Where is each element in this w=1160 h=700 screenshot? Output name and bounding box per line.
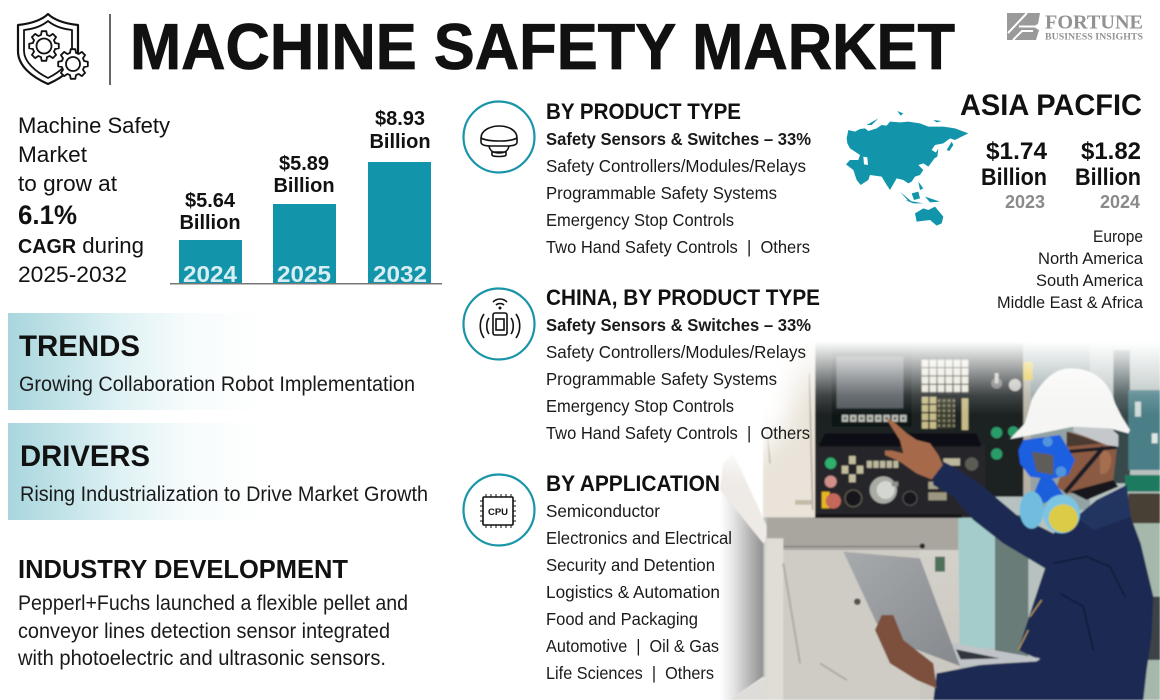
panel: drivers <box>8 423 428 520</box>
icon: CPU chip: CPU <box>488 507 508 518</box>
section: by application: Semiconductor <box>546 501 660 521</box>
panel: trends: Growing Collaboration Robot Implementation <box>19 373 415 396</box>
stat: 2024 value: $1.82 <box>1081 138 1141 165</box>
section: by product type: Programmable Safety Systems <box>546 183 777 203</box>
bar chart: market size: Billion <box>273 175 335 197</box>
section: by application: Security and Detention <box>546 555 715 575</box>
title: MACHINE SAFETY MARKET <box>130 10 955 83</box>
growth summary text: Market <box>18 142 88 167</box>
control panel <box>815 340 1023 518</box>
worker goggles and respirator <box>1018 435 1080 533</box>
bar chart: market size: 2024 <box>183 261 237 287</box>
section: by application: BY APPLICATION <box>546 471 720 496</box>
header divider <box>109 14 111 85</box>
stat: 2024 value <box>1075 138 1141 212</box>
grey machine side panel <box>720 453 772 700</box>
worker helmet <box>1010 368 1130 447</box>
section: by product type: BY PRODUCT TYPE <box>546 99 741 124</box>
panel: trends: TRENDS <box>19 330 140 363</box>
other regions list: Europe <box>1093 227 1143 246</box>
bar chart: market size: Billion <box>369 131 431 153</box>
panel: drivers: DRIVERS <box>20 440 150 473</box>
growth summary text: to grow at <box>18 171 118 196</box>
section: by application: Logistics & Automation <box>546 582 720 602</box>
growth summary text: CAGR during <box>18 233 144 258</box>
stat: 2023 value: 2023 <box>1005 192 1045 212</box>
section: by product type: Safety Sensors & Switches – 33% <box>546 129 811 149</box>
bar chart: market size: 2032 <box>373 261 427 287</box>
growth summary text <box>18 113 171 287</box>
other regions list: North America <box>1038 249 1144 268</box>
heading: Asia Pacific: ASIA PACFIC <box>960 89 1142 122</box>
icon: CPU chip <box>464 474 534 546</box>
stat: 2024 value: Billion <box>1075 164 1141 191</box>
stat: 2023 value: $1.74 <box>986 138 1048 165</box>
photo fades <box>690 318 1160 470</box>
other regions list: South America <box>1036 271 1144 290</box>
section: by application: Electronics and Electrical <box>546 528 732 548</box>
section: by product type: Emergency Stop Controls <box>546 210 734 230</box>
logo icon: shield with gears <box>18 14 88 84</box>
lower hand <box>875 615 937 688</box>
section: by product type <box>546 99 811 257</box>
panel: industry development: conveyor lines detection sensor integrated <box>18 620 390 643</box>
bar chart: market size: $5.89 <box>279 153 329 175</box>
worker jacket <box>933 462 1153 700</box>
section: by application <box>546 471 732 683</box>
photo: worker at machine control panel <box>720 340 1160 700</box>
section: china by product type: Programmable Safety Systems <box>546 369 777 389</box>
stat: 2024 value: 2024 <box>1100 192 1140 212</box>
cabinet <box>765 517 960 700</box>
brand logo: Fortune Business Insights <box>1007 12 1143 42</box>
panel: industry development: Pepperl+Fuchs launched a flexible pellet and <box>18 592 408 615</box>
section: by application: Automotive | Oil & Gas <box>546 636 719 656</box>
section: by application: Life Sciences | Others <box>546 663 714 683</box>
panel: industry development <box>17 554 408 670</box>
laptop <box>843 552 1040 666</box>
upper wall <box>763 340 817 517</box>
panel: industry development: INDUSTRY DEVELOPMENT <box>18 554 348 584</box>
map: Asia Pacific <box>846 111 968 226</box>
icon: wireless sensor <box>464 288 534 360</box>
section: china by product type: Two Hand Safety Controls | Others <box>546 423 810 443</box>
section: china by product type: Emergency Stop Controls <box>546 396 734 416</box>
section: china by product type <box>546 285 820 443</box>
other regions list: Middle East & Africa <box>997 293 1144 312</box>
growth summary text: 6.1% <box>18 200 77 230</box>
panel: industry development: with photoelectric and ultrasonic sensors. <box>17 647 386 670</box>
factory background <box>763 340 1160 700</box>
panel: trends <box>8 313 415 410</box>
worker face <box>1057 432 1118 500</box>
growth summary text: 2025-2032 <box>18 262 127 287</box>
section: by product type: Two Hand Safety Controls | Others <box>546 237 810 257</box>
brand logo: Fortune Business Insights: FORTUNE <box>1045 12 1143 34</box>
bar chart: market size: $5.64 <box>185 190 236 212</box>
stat: 2023 value: Billion <box>981 164 1047 191</box>
stat: 2023 value <box>981 138 1048 212</box>
section: by product type: Safety Controllers/Modules/Relays <box>546 156 806 176</box>
bar chart: market size: 2025 <box>277 261 331 287</box>
growth summary text: Machine Safety <box>18 113 171 138</box>
bar chart: market size: Billion <box>179 212 241 234</box>
other regions list <box>997 227 1144 312</box>
pointing hand <box>885 418 943 479</box>
section: by application: Food and Packaging <box>546 609 698 629</box>
section: china by product type: Safety Sensors & Switches – 33% <box>546 315 811 335</box>
icon: safety sensor <box>464 102 534 172</box>
bar chart: market size <box>170 108 442 287</box>
section: china by product type: CHINA, BY PRODUCT TYPE <box>546 285 820 310</box>
panel: drivers: Rising Industrialization to Drive Market Growth <box>20 483 428 506</box>
brand logo: Fortune Business Insights: BUSINESS INSIGHTS <box>1045 32 1143 42</box>
bar chart: market size: $8.93 <box>375 108 425 130</box>
section: china by product type: Safety Controllers/Modules/Relays <box>546 342 806 362</box>
